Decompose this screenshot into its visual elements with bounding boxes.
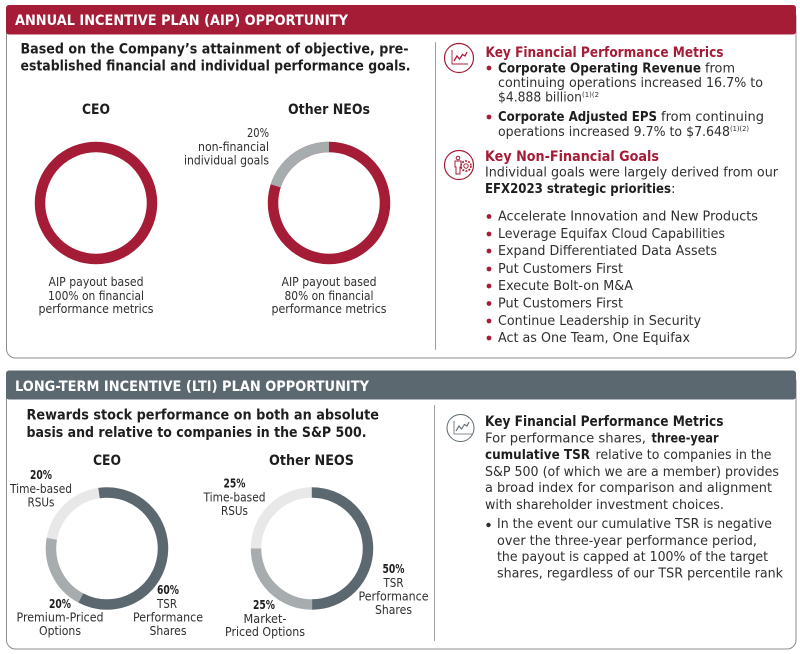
chart: other NEOs AIP donut xyxy=(184,102,400,316)
chart: other NEOs AIP donut: performance metrics xyxy=(272,301,386,316)
header bar: ANNUAL INCENTIVE PLAN (AIP) OPPORTUNITY xyxy=(15,13,349,29)
label: premium-priced options: Premium-Priced xyxy=(16,610,104,624)
label: TSR performance shares: 60% xyxy=(157,583,179,597)
chart: other NEOs AIP donut: non-financial xyxy=(198,139,269,154)
key financial performance metrics: from xyxy=(705,60,735,76)
chart: other NEOs AIP donut: individual goals xyxy=(184,152,269,168)
icon: line chart in circle xyxy=(444,44,474,72)
chart: CEO AIP donut: performance metrics xyxy=(38,301,154,316)
key financial performance metrics text: over the three-year performance period, xyxy=(497,533,757,549)
label: time-based RSUs xyxy=(9,468,72,510)
label: time-based RSUs: RSUs xyxy=(221,503,248,518)
label: time-based RSUs: Time-based xyxy=(203,490,266,504)
strategic priorities list: Expand Differentiated Data Assets xyxy=(498,243,717,259)
chart: CEO AIP donut: CEO xyxy=(82,102,110,118)
label: TSR performance shares xyxy=(133,583,203,638)
strategic priorities list: Execute Bolt-on M&A xyxy=(498,278,634,294)
panel outline xyxy=(6,8,796,358)
chart: other NEOs AIP donut: AIP payout based xyxy=(282,274,376,289)
panel outline xyxy=(6,373,796,649)
header bar xyxy=(6,5,796,34)
key financial performance metrics text: cumulative TSR xyxy=(485,447,591,463)
label: time-based RSUs: RSUs xyxy=(28,494,54,510)
label: TSR performance shares: 50% xyxy=(382,562,404,576)
key financial performance metrics xyxy=(486,45,764,140)
key financial performance metrics text: three-year xyxy=(652,430,719,446)
label: time-based RSUs: Time-based xyxy=(9,481,72,496)
key non-financial goals: EFX2023 strategic priorities xyxy=(485,181,671,197)
intro text: basis and relative to companies in the S&P 500. xyxy=(26,425,366,441)
key financial performance metrics: Key Financial Performance Metrics xyxy=(486,45,724,61)
strategic priorities list xyxy=(487,208,758,346)
intro text xyxy=(26,408,379,441)
label: time-based RSUs: 20% xyxy=(30,468,52,482)
key financial performance metrics: Corporate Operating Revenue xyxy=(498,60,701,76)
key financial performance metrics text: the payout is capped at 100% of the target xyxy=(497,549,768,565)
panel: long-term incentive plan xyxy=(6,370,796,649)
label: market-priced options xyxy=(225,598,305,639)
key financial performance metrics: Corporate Adjusted EPS xyxy=(498,109,657,125)
label: premium-priced options: Options xyxy=(39,623,81,638)
header bar xyxy=(6,370,796,400)
chart: CEO LTI donut: CEO xyxy=(93,453,121,469)
key financial performance metrics text: relative to companies in the xyxy=(596,447,772,463)
chart: CEO LTI donut xyxy=(9,453,203,638)
key non-financial goals: Key Non-Financial Goals xyxy=(485,149,659,165)
strategic priorities list: Put Customers First xyxy=(498,261,623,277)
key non-financial goals: Individual goals were largely derived from our xyxy=(485,164,778,180)
label: market-priced options: 25% xyxy=(253,598,275,612)
intro text xyxy=(20,42,410,74)
label: time-based RSUs xyxy=(203,476,266,518)
strategic priorities list: Continue Leadership in Security xyxy=(498,313,701,329)
key financial performance metrics text xyxy=(485,414,783,582)
key financial performance metrics: operations increased 9.7% to $7.648 xyxy=(498,124,730,140)
strategic priorities list: Leverage Equifax Cloud Capabilities xyxy=(498,226,725,242)
icon: person with gear in circle xyxy=(444,150,474,180)
label: TSR performance shares: Performance xyxy=(133,610,203,624)
key financial performance metrics text: a broad index for comparison and alignment xyxy=(485,480,772,496)
key financial performance metrics text: with shareholder investment choices. xyxy=(485,497,724,513)
label: TSR performance shares: Shares xyxy=(375,602,412,617)
key non-financial goals: : xyxy=(671,181,676,197)
strategic priorities list: Accelerate Innovation and New Products xyxy=(498,208,758,224)
label: TSR performance shares xyxy=(358,562,429,617)
label: time-based RSUs: 25% xyxy=(224,476,246,490)
label: TSR performance shares: TSR xyxy=(156,596,177,611)
key financial performance metrics text: S&P 500 (of which we are a member) provides xyxy=(485,464,779,480)
intro text: established financial and individual performance goals. xyxy=(20,58,410,74)
chart: other NEOs AIP donut: 20% xyxy=(247,125,269,140)
key financial performance metrics text: Key Financial Performance Metrics xyxy=(485,414,724,430)
icon: grey line chart in circle xyxy=(447,414,474,442)
chart: other NEOS LTI donut: Other NEOS xyxy=(269,453,354,469)
panel: annual incentive plan xyxy=(6,5,796,358)
label: TSR performance shares: Performance xyxy=(358,588,429,604)
key financial performance metrics: (1)(2 xyxy=(582,91,599,99)
key non-financial goals xyxy=(485,149,778,346)
label: TSR performance shares: TSR xyxy=(383,575,404,590)
intro text: Based on the Company’s attainment of objective, pre- xyxy=(20,42,409,58)
key financial performance metrics: (1)(2) xyxy=(730,125,749,133)
label: premium-priced options: 20% xyxy=(49,597,71,611)
key financial performance metrics text: shares, regardless of our TSR percentile rank xyxy=(497,566,783,582)
key financial performance metrics: continuing operations increased 16.7% to xyxy=(498,75,763,91)
chart: CEO AIP donut: 100% on financial xyxy=(48,288,144,303)
chart: other NEOs AIP donut: Other NEOs xyxy=(288,102,370,118)
key financial performance metrics: $4.888 billion xyxy=(498,90,582,106)
key financial performance metrics text: For performance shares, xyxy=(485,430,646,446)
label: TSR performance shares: Shares xyxy=(150,623,186,638)
chart: other NEOS LTI donut xyxy=(203,453,429,639)
header bar: LONG-TERM INCENTIVE (LTI) PLAN OPPORTUNITY xyxy=(15,379,370,395)
intro text: Rewards stock performance on both an absolute xyxy=(26,408,379,424)
label: premium-priced options xyxy=(16,597,104,638)
chart: CEO AIP donut xyxy=(38,102,154,316)
strategic priorities list: Put Customers First xyxy=(498,296,623,312)
strategic priorities list: Act as One Team, One Equifax xyxy=(498,330,690,346)
chart: CEO AIP donut: AIP payout based xyxy=(48,274,144,289)
label: market-priced options: Market- xyxy=(244,611,286,626)
chart: other NEOs AIP donut: 80% on financial xyxy=(284,288,374,303)
key financial performance metrics text: In the event our cumulative TSR is negative xyxy=(497,516,772,532)
label: market-priced options: Priced Options xyxy=(225,624,305,639)
key financial performance metrics: from continuing xyxy=(661,109,764,125)
